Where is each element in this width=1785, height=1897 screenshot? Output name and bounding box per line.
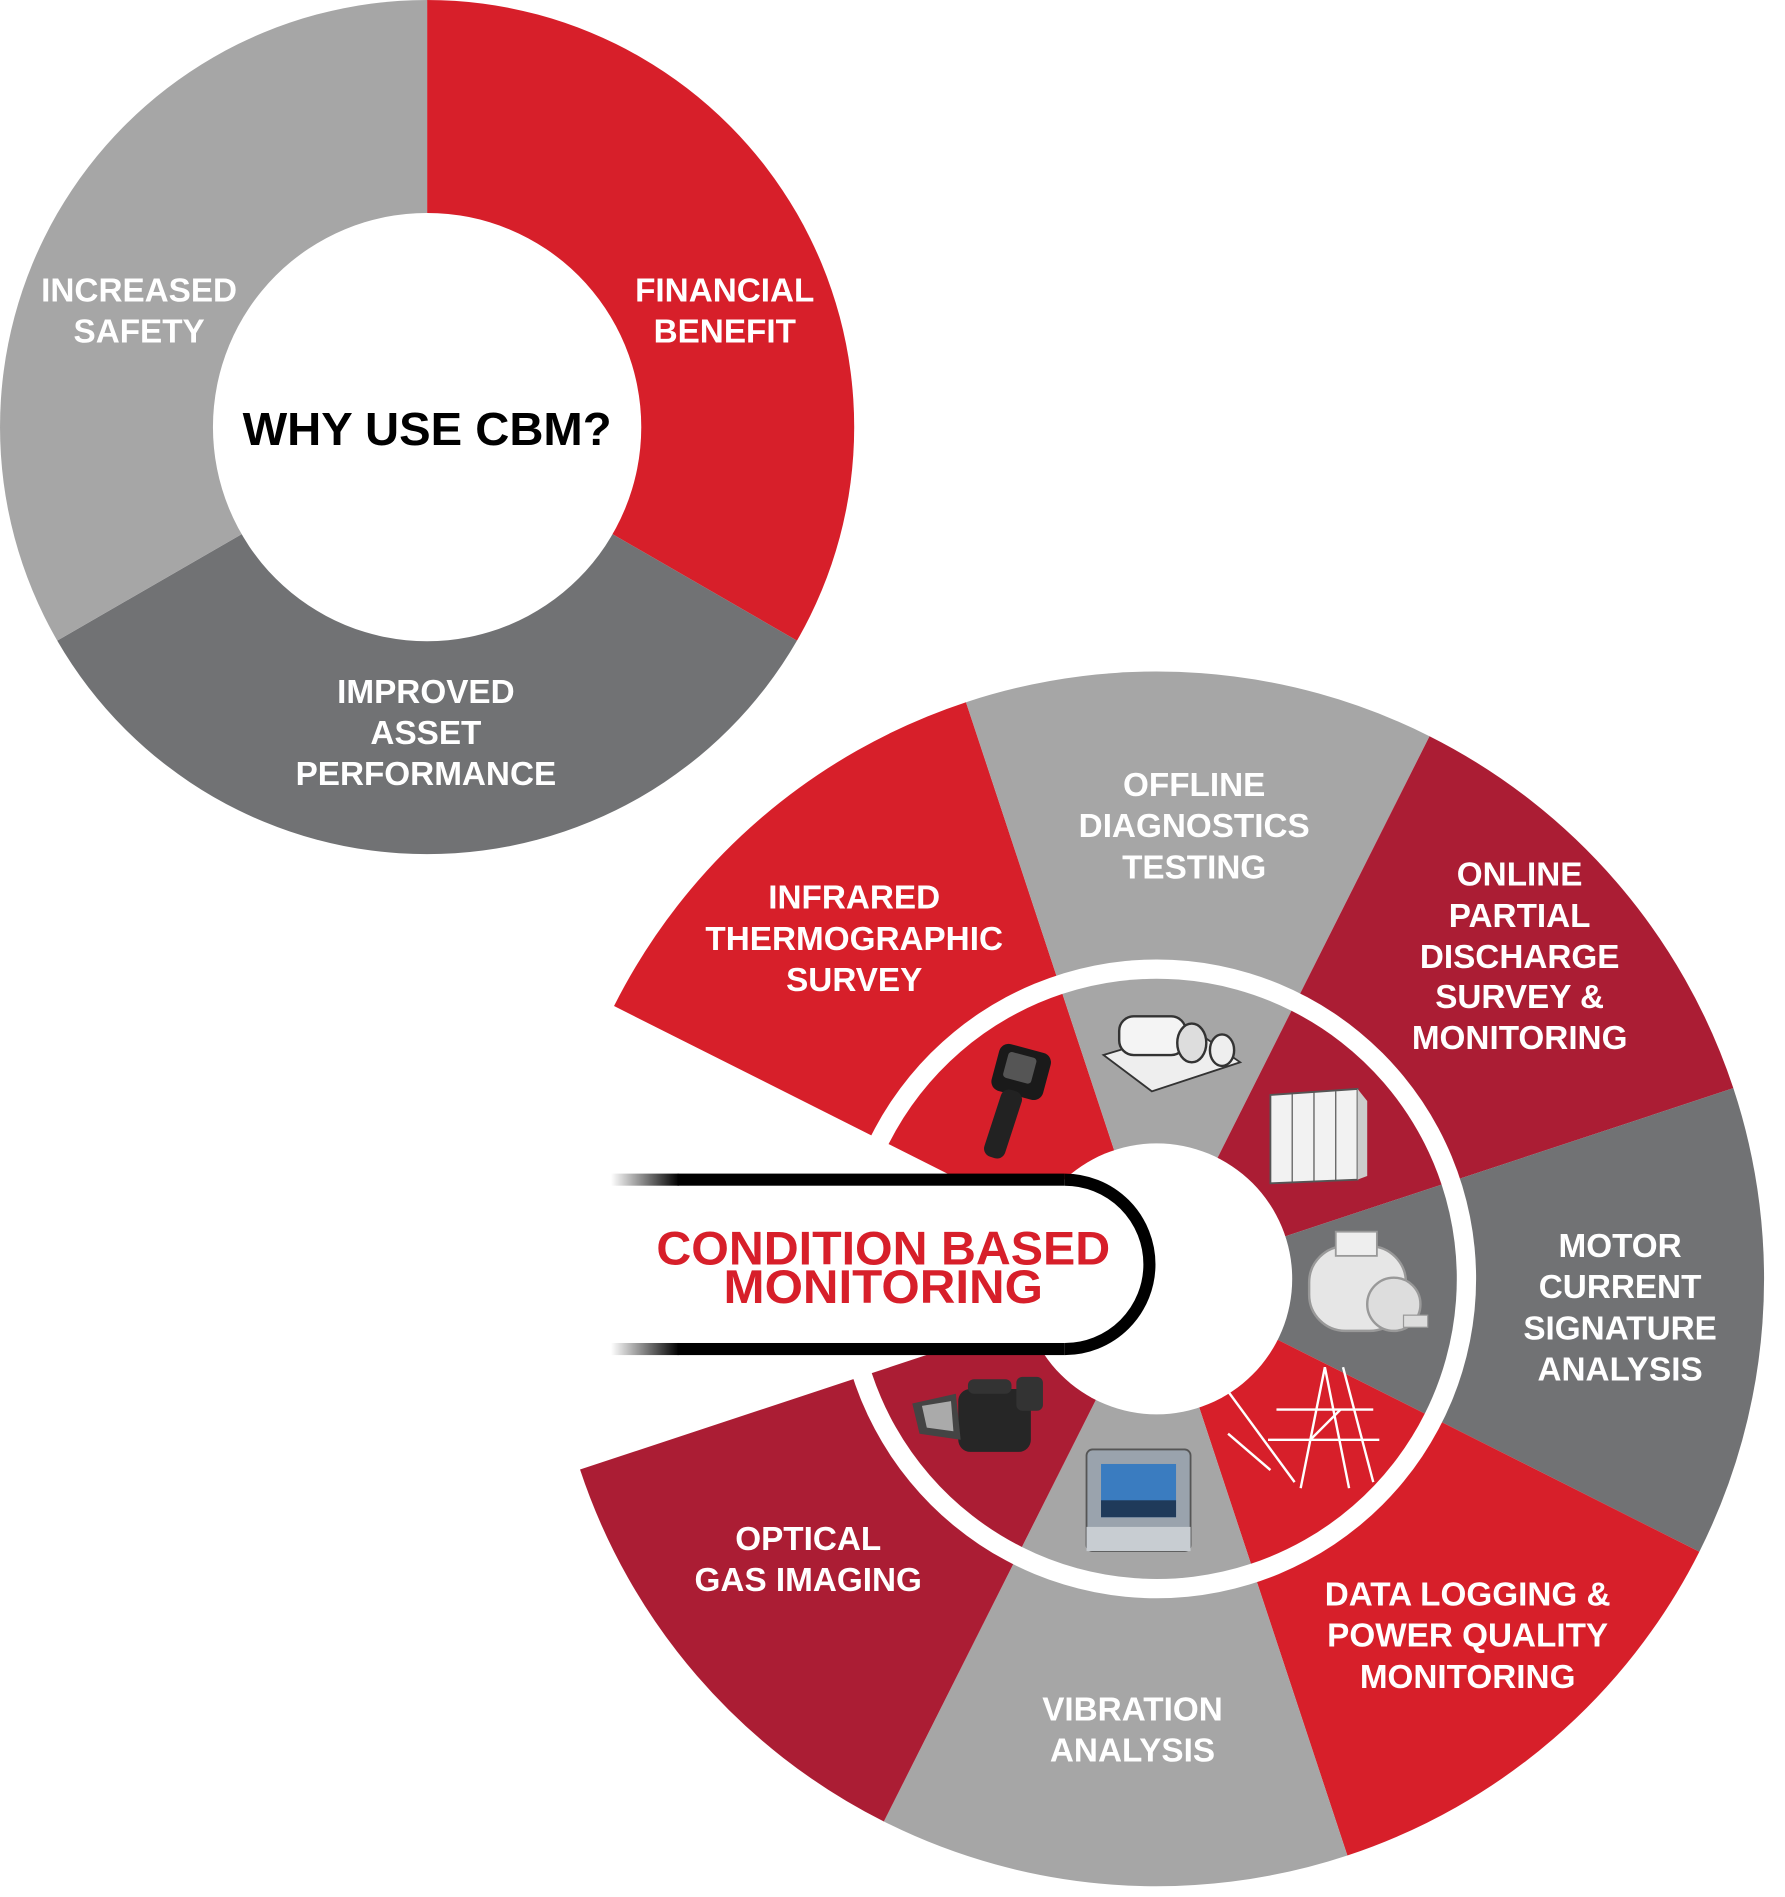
icon: transmission tower <box>1228 1367 1379 1488</box>
segment: infrared thermographic survey <box>614 702 1157 1279</box>
segment: improved asset performance <box>57 427 797 854</box>
label: increased safety: INCREASED <box>41 272 237 309</box>
heading: condition based monitoring: CONDITION BASED <box>656 1221 1110 1274</box>
label: offline diagnostics testing: DIAGNOSTICS <box>1079 808 1310 845</box>
segment: offline diagnostics testing <box>966 672 1430 1279</box>
label: increased safety: SAFETY <box>74 313 205 350</box>
segment: data logging power quality <box>1157 1279 1699 1856</box>
label: online partial discharge survey & monitoring: SURVEY & <box>1435 979 1604 1016</box>
heading: why use CBM: WHY USE CBM? <box>243 403 612 455</box>
label: infrared thermographic survey: SURVEY <box>786 962 922 999</box>
heading: condition based monitoring: MONITORING <box>724 1260 1043 1313</box>
label: motor current signature analysis: MOTOR <box>1558 1228 1682 1265</box>
label: motor current signature analysis: CURRENT <box>1539 1269 1701 1306</box>
label: online partial discharge survey & monitoring: PARTIAL <box>1449 898 1591 935</box>
label: infrared thermographic survey: INFRARED <box>768 880 940 917</box>
segment: online partial discharge <box>1157 736 1733 1279</box>
icon: electric motor <box>1309 1232 1428 1331</box>
label: online partial discharge survey & monitoring: ONLINE <box>1457 857 1583 894</box>
icon: vibration analyzer device <box>1087 1449 1191 1551</box>
icon: offline test machine <box>1103 1016 1240 1091</box>
chart: condition based monitoring wheel <box>580 672 1764 1886</box>
label: online partial discharge survey & monitoring: DISCHARGE <box>1420 939 1619 976</box>
inner ring segments <box>872 979 1457 1579</box>
label: financial benefit: FINANCIAL <box>635 272 814 309</box>
label: optical gas imaging: GAS IMAGING <box>695 1562 922 1599</box>
icon: optical gas imaging camera <box>912 1377 1043 1452</box>
label: vibration analysis: VIBRATION <box>1042 1691 1223 1728</box>
label: optical gas imaging: OPTICAL <box>735 1521 881 1558</box>
label: improved asset performance: IMPROVED <box>337 674 515 711</box>
segment: vibration analysis <box>884 1279 1347 1886</box>
label: motor current signature analysis: SIGNATURE <box>1523 1310 1717 1347</box>
segment: optical gas imaging <box>580 1279 1157 1822</box>
label: infrared thermographic survey: THERMOGRAPHIC <box>705 921 1003 958</box>
label: offline diagnostics testing: TESTING <box>1122 849 1266 886</box>
segment: increased safety <box>0 0 427 641</box>
icon: thermal camera <box>982 1042 1053 1161</box>
label: online partial discharge survey & monitoring: MONITORING <box>1412 1020 1627 1057</box>
label: data logging & power quality monitoring: DATA LOGGING & <box>1325 1577 1611 1614</box>
label: motor current signature analysis: ANALYSIS <box>1538 1351 1703 1388</box>
icon: switchgear panels <box>1270 1089 1367 1183</box>
segment: motor current signature analysis <box>1157 1088 1764 1552</box>
segment: financial benefit <box>427 0 854 641</box>
label: offline diagnostics testing: OFFLINE <box>1123 767 1265 804</box>
label: financial benefit: BENEFIT <box>654 313 796 350</box>
label: improved asset performance: PERFORMANCE <box>296 756 556 793</box>
chart: why use CBM donut <box>0 0 854 854</box>
label: data logging & power quality monitoring: POWER QUALITY <box>1327 1618 1608 1655</box>
banner: condition based monitoring <box>611 1174 1149 1355</box>
label: improved asset performance: ASSET <box>370 715 481 752</box>
label: vibration analysis: ANALYSIS <box>1050 1733 1215 1770</box>
label: data logging & power quality monitoring: MONITORING <box>1360 1659 1575 1696</box>
